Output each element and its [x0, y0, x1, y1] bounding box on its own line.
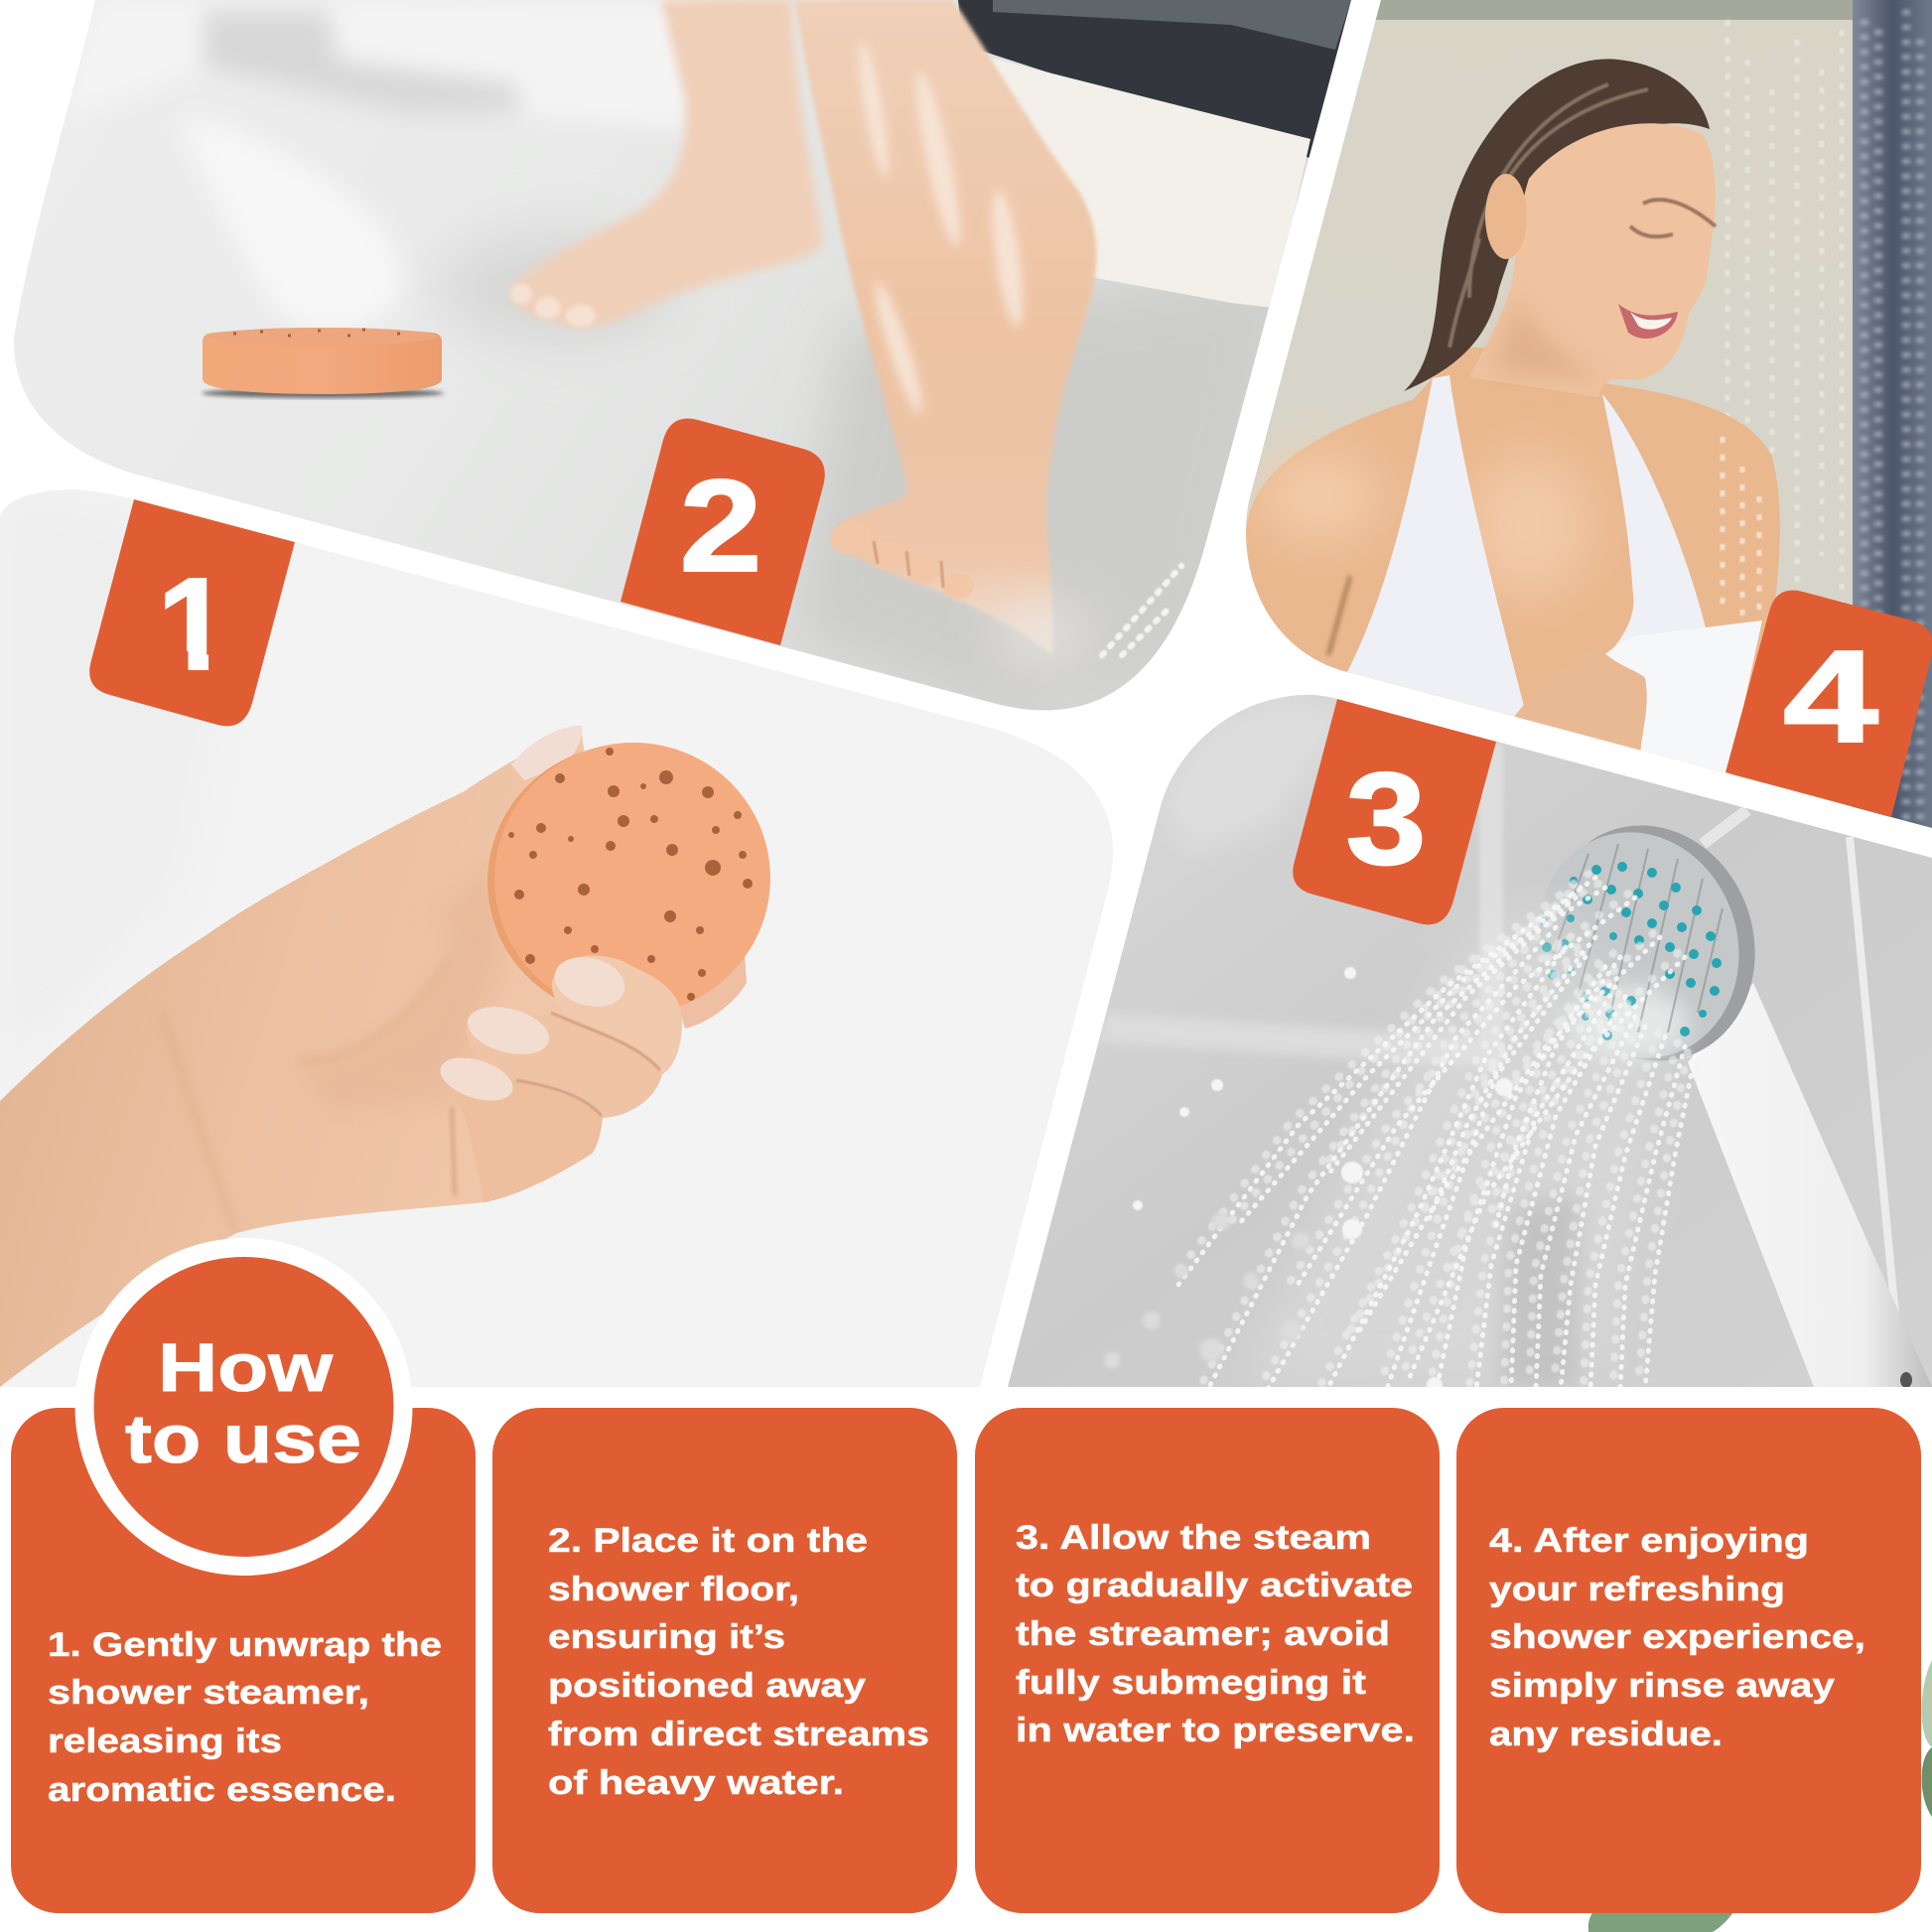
card: step 4	[1456, 1408, 1921, 1913]
card: step 2: of heavy water.	[548, 1764, 844, 1802]
panel: step 3 photo, shower head	[993, 685, 1932, 1393]
spray haze	[1231, 898, 1668, 1387]
hair	[1404, 59, 1710, 391]
head radial lines	[1554, 844, 1723, 1033]
title badge: How to use: How	[158, 1329, 333, 1406]
fingers over tablet	[441, 955, 682, 1202]
card: step 3: 3. Allow the steam	[1016, 1519, 1371, 1557]
water highlights on leg	[853, 40, 1030, 417]
card: step 3: in water to preserve.	[1016, 1712, 1415, 1749]
panel: step 1 photo, hand holding tablet	[0, 477, 1152, 1390]
splash near foot	[1102, 566, 1181, 655]
chest highlight	[1469, 457, 1588, 596]
back foot toes	[510, 284, 596, 327]
bokeh droplets in lower left	[1104, 1212, 1310, 1368]
card: step 4: your refreshing	[1489, 1571, 1785, 1608]
card: step 1: aromatic essence.	[48, 1771, 396, 1809]
card: step 3: fully submeging it	[1016, 1664, 1366, 1702]
shoulders and torso	[1246, 347, 1780, 794]
little finger	[441, 1063, 603, 1202]
large bright droplets	[1133, 967, 1513, 1393]
mist around front foot	[993, 601, 1092, 670]
card: step 3	[975, 1408, 1440, 1913]
card: step 1: releasing its	[48, 1723, 282, 1760]
badge: number 4: 4	[1783, 623, 1878, 769]
hand and arm	[0, 726, 682, 1387]
eucalyptus leaf at bottom	[1588, 1901, 1739, 1932]
steam rising	[179, 119, 401, 333]
fingertip behind tablet	[675, 953, 747, 1029]
falling water on wall	[1727, 20, 1842, 616]
back leg	[509, 0, 823, 328]
window strip at top	[1370, 0, 1866, 20]
swimsuit left side	[1340, 375, 1529, 725]
badge: number 2: 2	[679, 453, 762, 599]
left darker area	[0, 486, 248, 1082]
left shoulder highlight	[1261, 452, 1380, 541]
darker column under spray	[1499, 1191, 1579, 1387]
right pipe line	[1850, 837, 1902, 1387]
shower curtain	[1853, 0, 1932, 854]
badge: number 3	[1293, 699, 1496, 924]
underarm shadow	[1328, 576, 1350, 655]
dark window frame	[958, 0, 1351, 159]
badge: number 1: 1	[157, 551, 230, 697]
card: step 2	[492, 1408, 957, 1913]
title badge: How to use	[75, 1238, 413, 1576]
swimsuit right side	[1522, 394, 1708, 707]
ear	[1485, 174, 1527, 259]
horizontal light band	[1097, 1013, 1489, 1067]
water on right arm	[1723, 437, 1759, 616]
neck shadow	[1489, 298, 1608, 382]
smile teeth	[1630, 312, 1672, 330]
palm creases	[162, 959, 449, 1231]
finger nail 2	[463, 999, 554, 1062]
eyebrow and eye	[1630, 200, 1716, 236]
card: step 1	[11, 1408, 476, 1913]
title badge: How to use: to use	[125, 1401, 361, 1477]
covers for the numeral foot	[149, 651, 238, 675]
wall behind shower floor	[105, 6, 683, 123]
shower steamer tablet	[203, 328, 442, 394]
finger crease	[452, 1107, 501, 1196]
card: step 2: positioned away	[548, 1667, 866, 1705]
shower head	[1508, 798, 1785, 1088]
badge: number 3: 3	[1346, 746, 1426, 892]
toe creases	[874, 541, 943, 588]
card: step 4: any residue.	[1489, 1716, 1723, 1753]
card: step 2: shower floor,	[548, 1571, 799, 1608]
light rounded top-left wall	[1162, 697, 1350, 854]
white wall ledge	[978, 55, 1311, 308]
eucalyptus leaf at right edge	[1922, 1660, 1932, 1817]
front leg with raised heel	[794, 0, 1096, 655]
badge: number 4	[1725, 591, 1932, 817]
badge: number 1	[89, 499, 295, 726]
card: step 2: ensuring it’s	[548, 1618, 785, 1656]
pipe behind head	[1703, 810, 1747, 844]
wet floor shadow	[445, 228, 638, 344]
grey window top	[993, 0, 1351, 50]
nozzles	[1540, 862, 1722, 1040]
hair strands	[1449, 84, 1648, 347]
thumb nail	[511, 726, 582, 780]
water droplet streams, fine	[1178, 878, 1695, 1389]
panel: step 2 photo, feet on shower floor	[0, 0, 1390, 755]
card: step 3: to gradually activate	[1016, 1567, 1413, 1604]
card: step 4: simply rinse away	[1489, 1667, 1835, 1705]
towel	[1579, 621, 1762, 789]
tablet shadow	[202, 388, 444, 398]
card: step 3: the streamer; avoid	[1016, 1615, 1390, 1653]
curtain droplets	[1864, 10, 1920, 844]
handle base dark tip	[1900, 1372, 1912, 1388]
badge: number 2	[621, 419, 825, 645]
card: step 1: shower steamer,	[48, 1674, 369, 1712]
card: step 2: from direct streams	[548, 1716, 929, 1753]
water droplet streams, soft	[1172, 874, 1688, 1385]
card: step 4: shower experience,	[1489, 1618, 1865, 1656]
panel: step 4 photo, woman in shower	[1231, 0, 1932, 854]
tablet held in hand	[466, 721, 792, 1038]
finger shadow lines	[516, 1013, 660, 1116]
face and neck	[1469, 123, 1716, 397]
card: step 4: 4. After enjoying	[1489, 1522, 1809, 1560]
wall strip behind head	[1479, 745, 1503, 1072]
finger nail 1	[549, 950, 630, 1014]
front foot toes	[830, 523, 974, 599]
blurred drain shadow	[204, 10, 521, 114]
hand on towel	[1514, 646, 1647, 755]
index finger	[552, 955, 682, 1074]
floor right shade	[796, 287, 1269, 708]
finger nail 3	[435, 1049, 518, 1109]
shower handle	[1688, 983, 1932, 1387]
card: step 1: 1. Gently unwrap the	[48, 1626, 442, 1664]
smile	[1618, 304, 1678, 339]
palm shading under thumb	[298, 854, 506, 1112]
middle finger	[467, 1010, 662, 1118]
card: step 2: 2. Place it on the	[548, 1522, 868, 1560]
